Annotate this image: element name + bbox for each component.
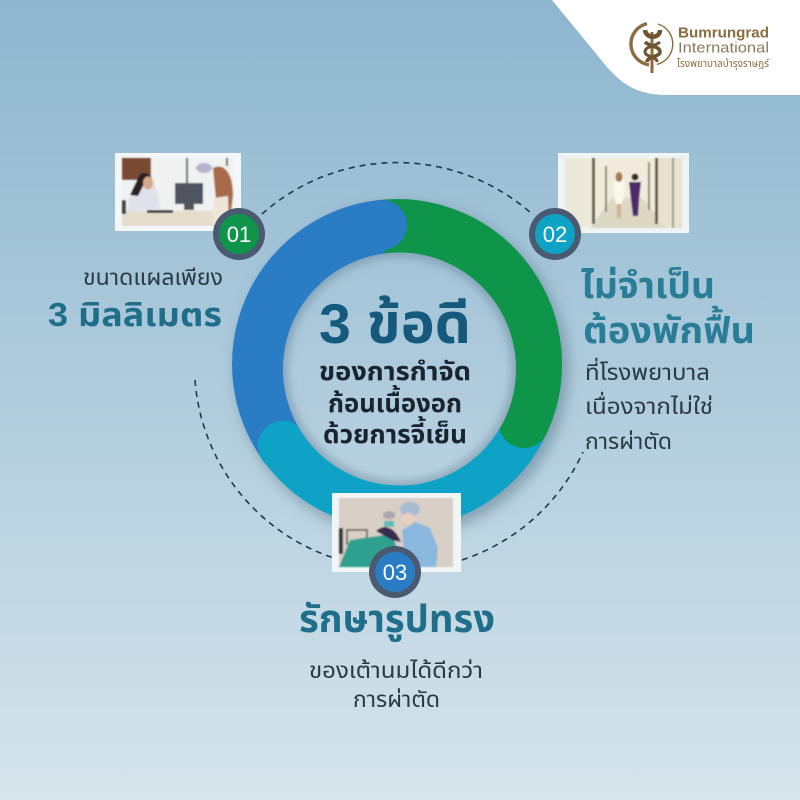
dashed connector circle: [195, 163, 583, 560]
donut ring: [258, 200, 549, 511]
badge 01: [213, 208, 265, 260]
photo 02: hospital corridor: [558, 153, 689, 233]
text 02 body: การผ่าตัด: [585, 429, 672, 454]
text 02 heading: ต้องพักฟื้น: [583, 305, 755, 351]
center title: 3 ข้อดี: 3 ข้อดี: [319, 292, 471, 355]
center subtitle: ก้อนเนื้องอก: [328, 385, 462, 418]
logo subtitle: International: [678, 40, 769, 56]
center subtitle: [319, 356, 471, 449]
photo 01: doctor consultation: [115, 153, 241, 231]
logo panel: [552, 0, 800, 95]
ring segment: cyan: [285, 422, 522, 502]
logo name: Bumrungrad: [678, 26, 769, 42]
badge 02: 02: [543, 222, 567, 247]
badge 03: [369, 546, 421, 598]
text 02 heading: [581, 265, 755, 351]
center subtitle: ของการกำจัด: [319, 356, 471, 386]
text 02 body: ที่โรงพยาบาล: [585, 357, 710, 385]
text 01 caption: ขนาดแผลเพียง: [83, 265, 223, 290]
center subtitle: ด้วยการจี้เย็น: [323, 416, 467, 449]
text 01 heading: 3 มิลลิเมตร: [48, 296, 222, 333]
logo: Bumrungrad International: [631, 24, 769, 73]
text 02 body: [585, 357, 713, 454]
text block 02: [581, 265, 755, 454]
photo 03: treatment room: [332, 493, 461, 572]
text 03 body: ของเต้านมได้ดีกว่า: [309, 658, 483, 683]
ring head: cyan: [258, 421, 308, 471]
ring head: blue: [357, 200, 407, 250]
text 03 heading: รักษารูปทรง: [299, 599, 495, 642]
text 02 body: เนื่องจากไม่ใช่: [585, 391, 713, 419]
text block 01: [48, 265, 223, 333]
badge 01: 01: [227, 222, 251, 247]
ring head: green: [499, 398, 549, 448]
ring hole: [283, 252, 516, 486]
ring segment: green: [382, 227, 535, 422]
ring hole inner shadow: [282, 251, 518, 487]
text 02 heading: ไม่จำเป็น: [581, 265, 715, 306]
badge 03: 03: [383, 560, 407, 585]
logo thai name: โรงพยาบาลบำรุงราษฎร์: [677, 58, 769, 70]
icon: caduceus emblem: [631, 24, 673, 73]
ring segment: blue: [260, 227, 382, 444]
ring shadow: [261, 229, 543, 511]
text 03 body: การผ่าตัด: [353, 687, 440, 712]
badge 02: [529, 208, 581, 260]
text block 03: [299, 599, 495, 712]
text 03 body: [309, 658, 483, 712]
